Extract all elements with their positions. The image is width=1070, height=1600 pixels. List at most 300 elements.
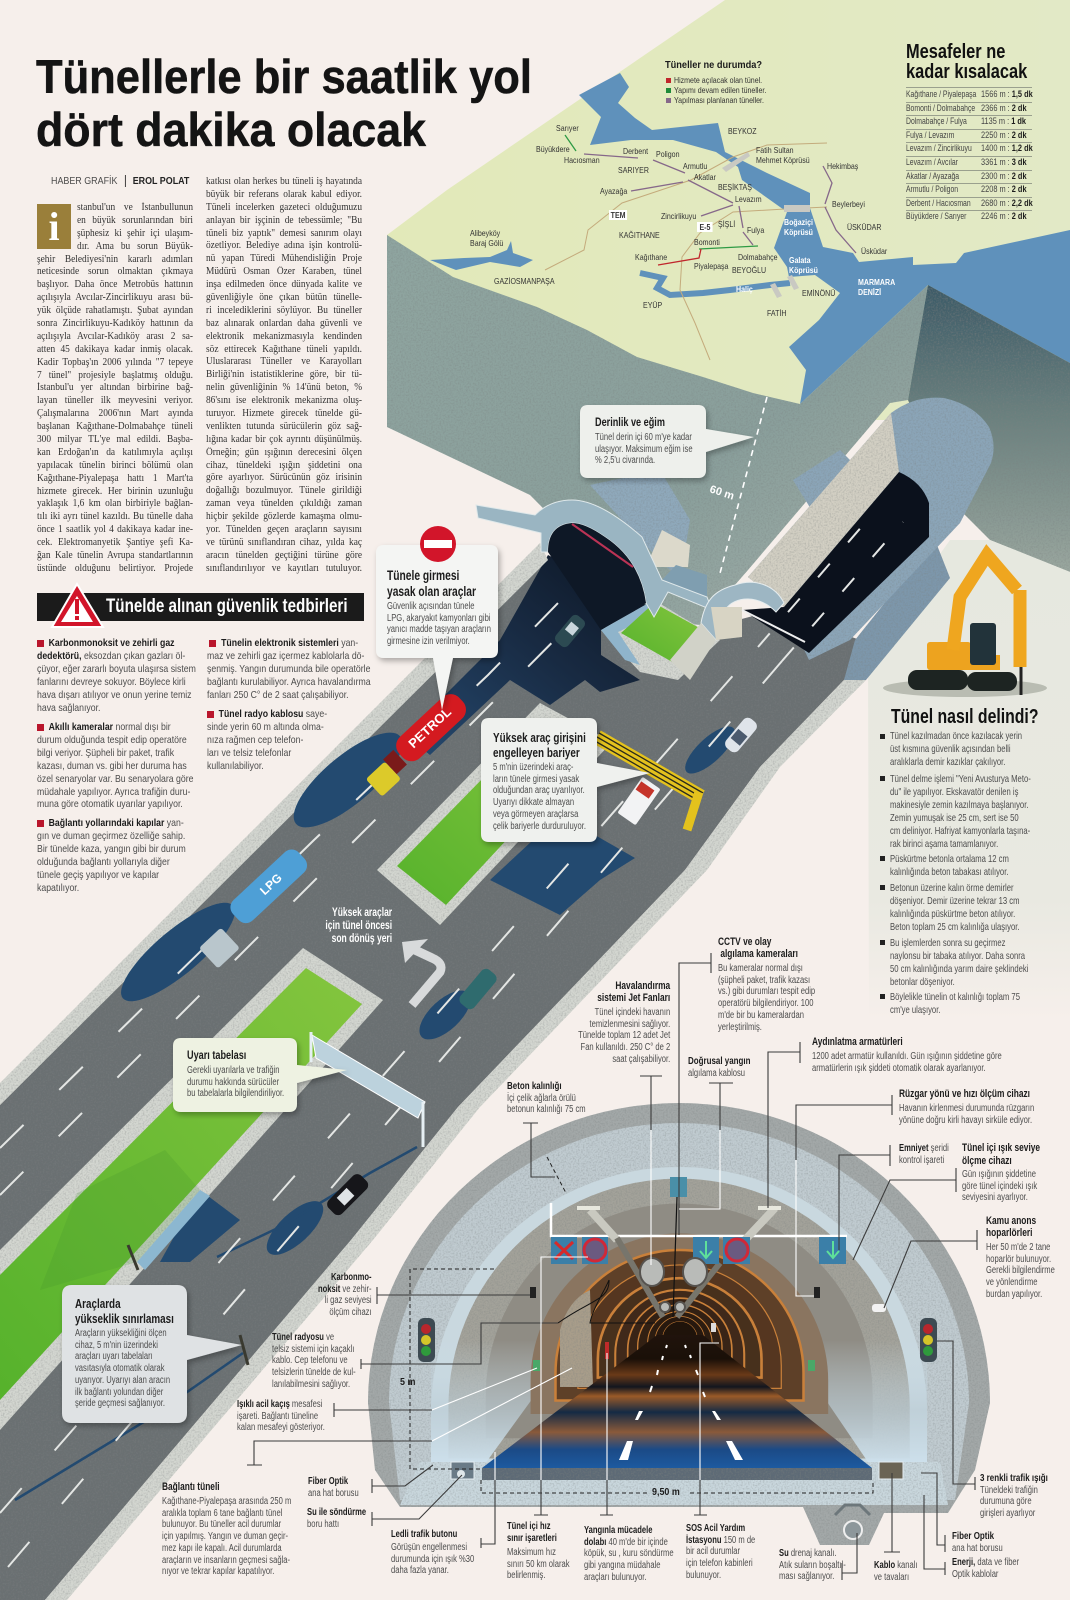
tunnel height label: 5 m bbox=[400, 1376, 415, 1388]
distances table: Kağıthane / Piyalepaşa bbox=[906, 89, 976, 99]
label: speakers: Gerekli bilgilendirme bbox=[986, 1265, 1055, 1276]
right tunnel tube bbox=[670, 398, 994, 680]
heading: distances: Mesafeler ne bbox=[906, 41, 1005, 63]
article column 1: Kağıthane-Piyalepaşa hattı 1 Mart'ta bbox=[37, 473, 193, 484]
article column 2: katkısı olan herkes bu tüneli iş hayatında bbox=[206, 176, 362, 187]
heading bar: safety measures: Tünelde alınan güvenlik tedbirleri bbox=[106, 596, 348, 617]
article column 1: İstanbul'u yer altından birbirine bağ- bbox=[37, 382, 193, 393]
label: light level: göre tünel içindeki ışık bbox=[962, 1181, 1037, 1192]
label: CCTV: operatörü bilgilendiriyor. 100 bbox=[718, 998, 813, 1009]
distances table: Bomonti / Dolmabahçe bbox=[906, 103, 975, 113]
article column 2: 86'sını ise elektronik mekanizma oluş- bbox=[206, 395, 362, 406]
safety text: column 1: çüyor, eğer zararlı boyuta ulaşırsa sistem bbox=[37, 663, 196, 675]
callout text: banned vehicles: yanıcı madde taşıyan araçların bbox=[387, 624, 491, 635]
depth label 60 m: 60 m bbox=[708, 483, 736, 503]
label: fire cabinet: araçları bulunuyor. bbox=[584, 1572, 647, 1583]
article column 2: inşa edilmeden önce dünyada kalite ve bbox=[206, 279, 362, 290]
label: CCTV: CCTV ve olay bbox=[718, 936, 771, 948]
safety text: column 1: hava dışarı atılıyor ve onun yerine temiz bbox=[37, 689, 192, 701]
article column 1: önce 1 saatlik yol 4 dakikaya kadar ine- bbox=[37, 524, 193, 535]
drop cap: i bbox=[48, 204, 60, 249]
map labels: Baraj Gölü bbox=[470, 238, 503, 248]
petrol tanker bbox=[366, 689, 471, 797]
map labels: BEŞİKTAŞ bbox=[718, 182, 752, 192]
heading bar: safety measures bbox=[37, 593, 364, 621]
safety text: column 1: fanlarını devreye sokuyor. Böylece kirli bbox=[37, 676, 186, 688]
label: led bollard: Ledli trafik butonu bbox=[391, 1529, 457, 1540]
safety text: column 1: gın ve duman geçirmez özelliğe sahip. bbox=[37, 830, 185, 842]
callout: banned vehicles bbox=[376, 545, 498, 710]
distances table: 2680 m : 2,2 dk bbox=[981, 198, 1033, 208]
label: speed limit: Maksimum hız bbox=[507, 1547, 556, 1558]
callout text: barrier: 5 m'nin üzerindeki araç- bbox=[493, 762, 573, 773]
label: light level: Gün ışığının şiddetine bbox=[962, 1169, 1036, 1180]
distances table: 2208 m : 2 dk bbox=[981, 184, 1027, 194]
safety text: column 1: bilgi veriyor. Şüpheli bir paket, trafik bbox=[37, 747, 174, 759]
label: speed limit bbox=[507, 1521, 570, 1581]
map labels: BEYOĞLU bbox=[732, 265, 766, 275]
distances table: Levazım / Zincirlikuyu bbox=[906, 143, 972, 153]
label: connection tunnel: Kağıthane-Piyalepaşa arasında 250 m bbox=[162, 1496, 291, 1507]
label: lit escape sign: kalan mesafeyi gösteriyor. bbox=[237, 1422, 325, 1433]
article column 2: ve türünü sınıflandıran cihaz, yılda kaç bbox=[206, 537, 362, 548]
map labels: KAĞITHANE bbox=[619, 230, 660, 240]
map labels: Boğaziçi bbox=[784, 217, 813, 227]
label: fire cabinet: köpük, su , kuru söndürme bbox=[584, 1548, 674, 1559]
callout text: banned vehicles: yasak olan araçlar bbox=[387, 584, 476, 599]
map labels: BEYKOZ bbox=[728, 126, 757, 136]
distances table: Derbent / Hacıosman bbox=[906, 198, 971, 208]
map labels: Üsküdar bbox=[861, 246, 887, 256]
callout text: height limit: Araçların yüksekliğini ölçen bbox=[75, 1328, 167, 1339]
jet fans bbox=[640, 1258, 707, 1312]
article column 2: zaman veya tünelden çıkıldığı zaman bbox=[206, 498, 362, 509]
label: fiber right bbox=[952, 1530, 1003, 1554]
map labels: Haliç bbox=[736, 284, 753, 294]
article column 1: şüphesiz ki şehir içi ulaşım- bbox=[77, 228, 193, 239]
map labels: E-5 bbox=[699, 222, 710, 232]
article column 2: hiçbir şekilde gözlerde kamaşma olmu- bbox=[206, 511, 362, 522]
label: jet fans: sistemi Jet Fanları bbox=[597, 992, 670, 1004]
label: tunnel radio: Tünel radyosu ve bbox=[272, 1332, 334, 1343]
label: CCTV: yerleştirilmiş. bbox=[718, 1022, 762, 1033]
title bbox=[36, 50, 532, 156]
label: drainage: ması sağlanıyor. bbox=[779, 1571, 834, 1582]
article column 1: layan tüneller ilk meyvesini veriyor. bbox=[37, 395, 193, 406]
distances table: Armutlu / Poligon bbox=[906, 184, 958, 194]
article column 1: açılışıyla Avcılar-Kadıköy arası 2 sa- bbox=[37, 331, 193, 342]
label: cable channel: Kablo kanalı bbox=[874, 1560, 918, 1571]
article column 2: Birliği'nin istatistiklerine göre, bir tü- bbox=[206, 369, 362, 380]
label: led bollard: durumunda için ışık %30 bbox=[391, 1554, 474, 1565]
safety text: column 2: kullanılabiliyor. bbox=[207, 760, 264, 772]
label: connection tunnel bbox=[162, 1481, 291, 1577]
safety text: column 1: hava sağlanıyor. bbox=[37, 702, 100, 714]
map labels: Hekimbaş bbox=[827, 161, 858, 171]
safety text: column 1: kapatılıyor. bbox=[37, 882, 79, 894]
callout text: height limit: araçları uyarı tabelaları bbox=[75, 1351, 153, 1362]
label: fiber right: ana hat borusu bbox=[952, 1543, 1003, 1554]
label: energy bbox=[952, 1557, 1020, 1580]
article column 2: cihaz, tüneldeki ışığın şiddetini ona bbox=[206, 460, 362, 471]
label: wind bbox=[899, 1088, 1034, 1126]
callout text: banned vehicles: Güvenlik açısından tünele bbox=[387, 601, 474, 612]
map legend bbox=[665, 59, 766, 105]
label: CCTV: vs.) gibi durumları tespit edip bbox=[718, 986, 815, 997]
article column 1: atten 45 dakikaya kadar inmiş olacak. bbox=[37, 344, 193, 355]
article column 2: söz ettirecek Kağıthane tüneli yapıldı. bbox=[206, 344, 362, 355]
map labels: ÜSKÜDAR bbox=[847, 222, 881, 232]
dug text list: betonlar döşeniyor. bbox=[890, 976, 955, 988]
map labels: Büyükdere bbox=[536, 144, 570, 154]
label: traffic light: girişleri ayarlıyor bbox=[980, 1508, 1035, 1519]
distances table: 2250 m : 2 dk bbox=[981, 130, 1027, 140]
safety text: column 2: sinde yerin 60 m altında olma- bbox=[207, 721, 324, 733]
callout: warning sign bbox=[173, 1038, 347, 1112]
label: safety lane: kontrol işareti bbox=[899, 1155, 944, 1166]
dug text list: Betonun üzerine kalın örme demirler bbox=[890, 882, 1014, 894]
label: fire cabinet: gibi yangına müdahale bbox=[584, 1560, 660, 1571]
map labels: Zincirlikuyu bbox=[661, 211, 696, 221]
heading: how was it dug: Tünel nasıl delindi? bbox=[891, 706, 1038, 728]
map labels: Hacıosman bbox=[564, 155, 600, 165]
article column 2: göre ayarlıyor. Sürücünün göz irisinin bbox=[206, 472, 362, 483]
article column 2: turuyor. Hizmete girecek tünelde gü- bbox=[206, 408, 362, 419]
callout text: height limit bbox=[75, 1296, 174, 1409]
panel background: how was the tunnel dug bbox=[868, 540, 1070, 1020]
label: fiber left: ana hat borusu bbox=[308, 1488, 359, 1499]
label: fire cabinet: Yangınla mücadele bbox=[584, 1525, 652, 1536]
map labels: Köprüsü bbox=[784, 227, 813, 237]
article column 2: baz alınarak onlardan daha güvenli ve bbox=[206, 318, 362, 329]
callout text: barrier: veya görmeyen araçlarsa bbox=[493, 809, 578, 820]
safety text: column 1: müdahale yapılıyor. Ayrıca trafiğin duru- bbox=[37, 786, 190, 798]
callout text: depth: Derinlik ve eğim bbox=[595, 415, 665, 429]
left tunnel portal bbox=[476, 470, 712, 630]
label: light level bbox=[962, 1142, 1040, 1203]
article column 2: Tüneli incelerken gazeteci olduğumuzu bbox=[206, 202, 362, 213]
label: fire detection cable: Doğrusal yangın bbox=[688, 1055, 751, 1067]
label: speakers: Kamu anons bbox=[986, 1215, 1036, 1227]
dug text list: makinesiyle zemin kazılmaya başlanıyor. bbox=[890, 799, 1028, 811]
callout text: height limit: Araçlarda bbox=[75, 1296, 121, 1311]
label: concrete thickness: betonun kalınlığı 75 cm bbox=[507, 1104, 586, 1115]
label: last turn before tunnel: Yüksek araçlar bbox=[332, 907, 392, 919]
long median with grass bbox=[0, 948, 383, 1430]
label: energy: Optik kablolar bbox=[952, 1569, 998, 1580]
label: fire detection cable: algılama kablosu bbox=[688, 1068, 745, 1079]
dug text list: kalınlığında beton tabakası atılıyor. bbox=[890, 866, 1008, 878]
leader lines bbox=[247, 953, 977, 1580]
byline: HABER GRAFİK EROL POLAT bbox=[51, 175, 189, 187]
label: SOS: bir acil durumlar bbox=[686, 1546, 740, 1557]
article column 2: lığına kadar bir çok ayrıntı düşünülmüş. bbox=[206, 434, 362, 445]
callout text: banned vehicles: LPG, akaryakıt kamyonları gibi bbox=[387, 613, 490, 624]
tunnel cross-section bbox=[368, 1103, 990, 1545]
label: traffic light bbox=[980, 1472, 1048, 1519]
callout text: banned vehicles: girmesine izin verilmiyor. bbox=[387, 636, 470, 647]
label: speed limit: belirlenmiş. bbox=[507, 1570, 545, 1581]
heading: distances bbox=[906, 41, 1028, 83]
map legend: Yapılması planlanan tüneller. bbox=[674, 95, 764, 105]
label: water extinguishing bbox=[307, 1507, 366, 1530]
label: concrete thickness bbox=[507, 1080, 586, 1115]
callout text: height limit: vasıtasıyla otomatik olarak bbox=[75, 1363, 165, 1374]
distances table: 3361 m : 3 dk bbox=[981, 157, 1027, 167]
map labels: Galata bbox=[789, 255, 811, 265]
article column 1: üstünde olduğunu belirtiyor. Projede bbox=[37, 563, 193, 574]
yellow height barrier bbox=[595, 733, 703, 830]
callout text: barrier: ların tünele girmesi yasak bbox=[493, 774, 579, 785]
callout text: barrier: engelleyen bariyer bbox=[493, 745, 580, 760]
LPG tanker bbox=[199, 845, 311, 969]
heading: distances: kadar kısalacak bbox=[906, 61, 1027, 83]
label: SOS bbox=[686, 1523, 755, 1581]
article column 1: sonra Zincirlikuyu-Kadıköy hattının da bbox=[37, 318, 193, 329]
dug text list: du" ile yapılıyor. Ekskavatör denilen iş bbox=[890, 786, 1018, 798]
lane markings bbox=[0, 566, 782, 1567]
safety text: column 1: Akıllı kameralar normal dışı bir bbox=[49, 721, 171, 733]
dug text list: rak birinci aşama tamamlanıyor. bbox=[890, 838, 998, 850]
label: connection tunnel: için yapılmış. Yangın ve duman geçir- bbox=[162, 1531, 288, 1542]
label: lit escape sign: Işıklı acil kaçış mesafesi bbox=[237, 1399, 322, 1410]
label: tunnel radio bbox=[272, 1332, 356, 1390]
drop cap bbox=[37, 204, 71, 249]
icon: warning triangle bbox=[50, 582, 104, 628]
map labels: Levazım bbox=[735, 194, 762, 204]
callout text: warning sign: Gerekli uyarılarla ve trafiğin bbox=[187, 1065, 280, 1076]
article column 2: anlayan bir işçinin de tebessümle; "Bu bbox=[206, 215, 362, 226]
callout text: height limit: şeride geçmesi sağlanıyor. bbox=[75, 1398, 165, 1409]
label: connection tunnel: mez kapı ile kapalı. Acil durumlarda bbox=[162, 1543, 282, 1554]
dug text list: Tünel kazılmadan önce kazılacak yerin bbox=[890, 730, 1022, 742]
label: CO sensor: ölçüm cihazı bbox=[330, 1307, 372, 1318]
label: speed limit: sınır işaretleri bbox=[507, 1533, 557, 1544]
road curbs bbox=[0, 540, 950, 1600]
LPG tanker: LPG bbox=[257, 871, 285, 898]
safety text: column 1: kazası, duman vs. gibi her duruma has bbox=[37, 760, 187, 772]
callout text: height limit: cihaz, 5 m'nin üzerindeki bbox=[75, 1340, 158, 1351]
callout text: barrier bbox=[493, 730, 586, 832]
safety text: column 2: maz ve zehirli gaz içermez kablolarla dö- bbox=[207, 650, 364, 662]
map labels: Akatlar bbox=[694, 172, 716, 182]
distances table: Levazım / Avcılar bbox=[906, 157, 958, 167]
article column 1: cek. Elektromanyetik Şantiye şefi Ka- bbox=[37, 537, 193, 548]
label: fire cabinet: dolabı 40 m'de bir içinde bbox=[584, 1537, 668, 1548]
label: jet fans: temizlenmesini sağlıyor. bbox=[589, 1019, 670, 1030]
label: speakers: Her 50 m'de 2 tane bbox=[986, 1242, 1050, 1253]
distances table: Büyükdere / Sarıyer bbox=[906, 211, 966, 221]
label: lighting: armatürlerin ışık şiddeti otomatik olarak ayarlanıyor. bbox=[812, 1063, 986, 1074]
label: jet fans bbox=[578, 980, 670, 1065]
bridges bbox=[722, 152, 810, 298]
label: water extinguishing: boru hattı bbox=[307, 1519, 339, 1530]
callout text: depth bbox=[595, 415, 693, 466]
map labels: EMİNÖNÜ bbox=[802, 288, 835, 298]
callout: height limit bbox=[62, 1285, 242, 1423]
dug text list bbox=[880, 730, 1031, 1016]
safety text: column 1: Bir tünelde kaza, yangın gibi bir durum bbox=[37, 843, 186, 855]
label: energy: Enerji, data ve fiber bbox=[952, 1557, 1019, 1568]
map labels: Köprüsü bbox=[789, 265, 818, 275]
safety text: column 2: fanları 250 C° de 2 saat çalışabiliyor. bbox=[207, 689, 349, 701]
safety text: column 2: Tünel radyo kablosu saye- bbox=[219, 708, 327, 720]
dug text list: aralıklarla demir kazıklar çakılıyor. bbox=[890, 756, 1005, 768]
label: speakers: burdan yapılıyor. bbox=[986, 1289, 1042, 1300]
article column 2: özetliyor. Belediye adına işin kontrolü- bbox=[206, 240, 362, 251]
article column 1: yapılacak tünelin birinci bölümü olan bbox=[37, 460, 193, 471]
distances table: 2366 m : 2 dk bbox=[981, 103, 1027, 113]
callout: depth bbox=[580, 405, 754, 478]
Bosphorus and Marmara water bbox=[430, 73, 1070, 404]
distances table: 1566 m : 1,5 dk bbox=[981, 89, 1033, 99]
dimension lines bbox=[410, 1157, 873, 1493]
map labels: Derbent bbox=[623, 146, 648, 156]
label: last turn before tunnel bbox=[325, 907, 392, 945]
label: traffic light: 3 renkli trafik ışığı bbox=[980, 1472, 1048, 1484]
map labels: Fulya bbox=[747, 225, 764, 235]
dug text list: naylonsu bir tabaka atılıyor. Daha sonra bbox=[890, 950, 1025, 962]
label: CO sensor: Karbonmo- bbox=[331, 1272, 372, 1283]
rock mass bbox=[387, 235, 1070, 625]
distances table: 1135 m : 1 dk bbox=[981, 116, 1026, 126]
map legend: Hizmete açılacak olan tünel. bbox=[674, 75, 762, 85]
label: fire cabinet bbox=[584, 1525, 674, 1583]
article column 2: doğallığı bozulmuyor. Tünele girildiği bbox=[206, 485, 362, 496]
label: tunnel radio: lanılabilmesini sağlıyor. bbox=[272, 1379, 350, 1390]
safety text: column 2: Tünelin elektronik sistemleri yan- bbox=[221, 637, 358, 649]
safety text: column 1: durum olduğunda tespit edip operatöre bbox=[37, 734, 187, 746]
dug text list: 50 cm kalınlığında yarım daire şeklindeki bbox=[890, 963, 1028, 975]
label: last turn before tunnel: için tünel öncesi bbox=[325, 920, 392, 932]
article column 1: açılışıyla Avcılar-Zincirlikuyu arası bü- bbox=[37, 292, 193, 303]
map labels: MARMARA bbox=[858, 277, 895, 287]
label: speakers bbox=[986, 1215, 1055, 1300]
article column 1: Kadir Topbaş'ın 2006 yılında "7 tepeye bbox=[37, 357, 193, 368]
label: SOS: SOS Acil Yardım bbox=[686, 1523, 745, 1534]
label: last turn before tunnel: son dönüş yeri bbox=[331, 933, 392, 945]
map labels: Piyalepaşa bbox=[694, 261, 728, 271]
label: CO sensor: li gaz seviyesi bbox=[325, 1295, 372, 1306]
map labels: Mehmet Köprüsü bbox=[756, 155, 810, 165]
map labels: FATİH bbox=[767, 308, 786, 318]
label: SOS: İstasyonu 150 m de bbox=[686, 1535, 755, 1546]
callout text: depth: Tünel derin içi 60 m'ye kadar bbox=[595, 432, 692, 443]
article column 1: başlanan Kağıthane-Dolmabahçe tüneli bbox=[37, 421, 193, 432]
article column 1: Çalışmalarına 2006'nın Mart ayında bbox=[37, 408, 193, 419]
label: CCTV: Bu kameralar normal dışı bbox=[718, 963, 803, 974]
label: connection tunnel: araçların ve insanların geçmesi sağla- bbox=[162, 1555, 290, 1566]
label: safety lane bbox=[899, 1143, 949, 1166]
callout text: barrier: Uyarıyı dikkate almayan bbox=[493, 797, 574, 808]
turn arrow bbox=[402, 939, 441, 1005]
cars and truck bbox=[325, 613, 759, 1218]
safety text: column 1: dedektörü, eksozdan çıkan gazları öl- bbox=[37, 650, 185, 662]
label: CCTV: algılama kameraları bbox=[720, 948, 798, 960]
article column 1: yaklaşık 1,6 km olan birbiriyle bağlan- bbox=[37, 498, 193, 509]
safety text: column 1: Karbonmonoksit ve zehirli gaz bbox=[49, 637, 175, 649]
island near portal bbox=[601, 600, 720, 680]
label: drainage: Atık suların boşaltıl- bbox=[779, 1560, 846, 1571]
callout text: banned vehicles: Tünele girmesi bbox=[387, 568, 459, 583]
label: traffic light: durumuna göre bbox=[980, 1496, 1032, 1507]
map labels: Armutlu bbox=[683, 161, 707, 171]
map labels: TEM bbox=[611, 210, 626, 220]
label: jet fans: Fan kullanıldı. 250 C° de 2 bbox=[580, 1042, 670, 1053]
safety text: column 2: şenmiş. Yangın durumunda bile operatörle bbox=[207, 663, 370, 675]
title: dört dakika olacak bbox=[36, 103, 427, 156]
safety text: column 1 bbox=[37, 637, 196, 894]
label: lighting: Aydınlatma armatürleri bbox=[812, 1036, 903, 1048]
callout text: barrier: olduğundan araç uyarılıyor. bbox=[493, 785, 585, 796]
map land bbox=[387, 0, 1070, 420]
distances table: Fulya / Levazım bbox=[906, 130, 954, 140]
traffic lights bbox=[418, 1318, 937, 1362]
label: cable channel: ve tavaları bbox=[874, 1572, 909, 1583]
label: light level: seviyesini ayarlıyor. bbox=[962, 1192, 1028, 1203]
label: cable channel bbox=[874, 1560, 918, 1583]
icon: no entry bbox=[420, 526, 456, 562]
petrol tanker: PETROL bbox=[405, 704, 454, 751]
article column 2: sınıflandırılıyor ve kayıtları tutuluyor. bbox=[206, 563, 362, 574]
dug text list: cm deliniyor. Hafriyat kamyonlarla taşına- bbox=[890, 825, 1030, 837]
callout text: height limit: ilk bağlantı yolundan diğer bbox=[75, 1387, 163, 1398]
map labels: Dolmabahçe bbox=[738, 252, 778, 262]
label: water extinguishing: Su ile söndürme bbox=[307, 1507, 366, 1518]
label: wind: Rüzgar yönü ve hızı ölçüm cihazı bbox=[899, 1088, 1030, 1100]
safety text: column 2: ları ve telsiz telefonlar bbox=[207, 747, 291, 759]
callout text: banned vehicles bbox=[387, 568, 491, 647]
safety text: column 1: Bağlantı yollarındaki kapılar yan- bbox=[49, 817, 184, 829]
label: lit escape sign: işareti. Bağlantı tüneline bbox=[237, 1411, 318, 1422]
article column 2: güvenliğiyle öne çıkan bütün tünelle- bbox=[206, 292, 362, 303]
map labels: Fatih Sultan bbox=[756, 145, 794, 155]
callout: barrier bbox=[481, 718, 650, 842]
label: connection tunnel: nıyor ve tekrar kapılar kapatılıyor. bbox=[162, 1566, 274, 1577]
dug text list: kalınlığında püskürtme beton atılıyor. bbox=[890, 908, 1015, 920]
label: wind: yönüne doğru kirli havayı sirküle ediyor. bbox=[899, 1115, 1032, 1126]
label: fiber left bbox=[308, 1476, 359, 1499]
label: led bollard bbox=[391, 1529, 474, 1576]
article column 2 bbox=[206, 176, 362, 574]
article column 2: yor. Tünelden geçen araçların sayısını bbox=[206, 524, 362, 535]
distances table: Akatlar / Ayazağa bbox=[906, 171, 959, 181]
gantry warning sign bbox=[311, 1032, 425, 1147]
article column 2: Örneğin; gün ışığının derecesini ölçen bbox=[206, 447, 362, 458]
map labels: SARIYER bbox=[618, 165, 649, 175]
article column 2: nelin güvenliğinin % 14'ünü beton, % bbox=[206, 382, 362, 393]
article column 1: yük ölçüde rahatlamıştı. Şubat ayından bbox=[37, 305, 193, 316]
map labels: GAZİOSMANPAŞA bbox=[494, 276, 555, 286]
article column 1: hizmete girecek. Her birinin uzunluğu bbox=[37, 486, 193, 497]
label: connection tunnel: aralıkla toplam 6 tane bağlantı tünel bbox=[162, 1508, 282, 1519]
map labels: Alibeyköy bbox=[470, 228, 500, 238]
article column 1: kan Erdoğan'ın da katılımıyla açılışı bbox=[37, 447, 193, 458]
dug text list: Zemin yumuşak ise 25 cm, sert ise 50 bbox=[890, 812, 1019, 824]
label: speakers: ve yönlendirme bbox=[986, 1277, 1038, 1288]
article column 1: 7 tünel" projesiyle başlatmış olduğu. bbox=[37, 370, 193, 381]
safety text: column 2 bbox=[207, 637, 371, 772]
callout text: depth: ulaşıyor. Maksimum eğim ise bbox=[595, 444, 693, 455]
dug text list: üst kısmına güvenlik açısından belli bbox=[890, 743, 1011, 755]
distances table: 1400 m : 1,2 dk bbox=[981, 143, 1033, 153]
article column 1: tılı iki ayrı tünel kazıldı. Bu tünelle daha bbox=[37, 511, 193, 522]
map tunnel lines bbox=[565, 135, 856, 265]
article column 2: venlikten tutunda sürücülerin göz sağ- bbox=[206, 421, 362, 432]
map labels: DENİZİ bbox=[858, 287, 881, 297]
dug text list: Tünel delme işlemi "Yeni Avusturya Meto- bbox=[890, 773, 1031, 785]
article column 1 bbox=[37, 202, 193, 574]
